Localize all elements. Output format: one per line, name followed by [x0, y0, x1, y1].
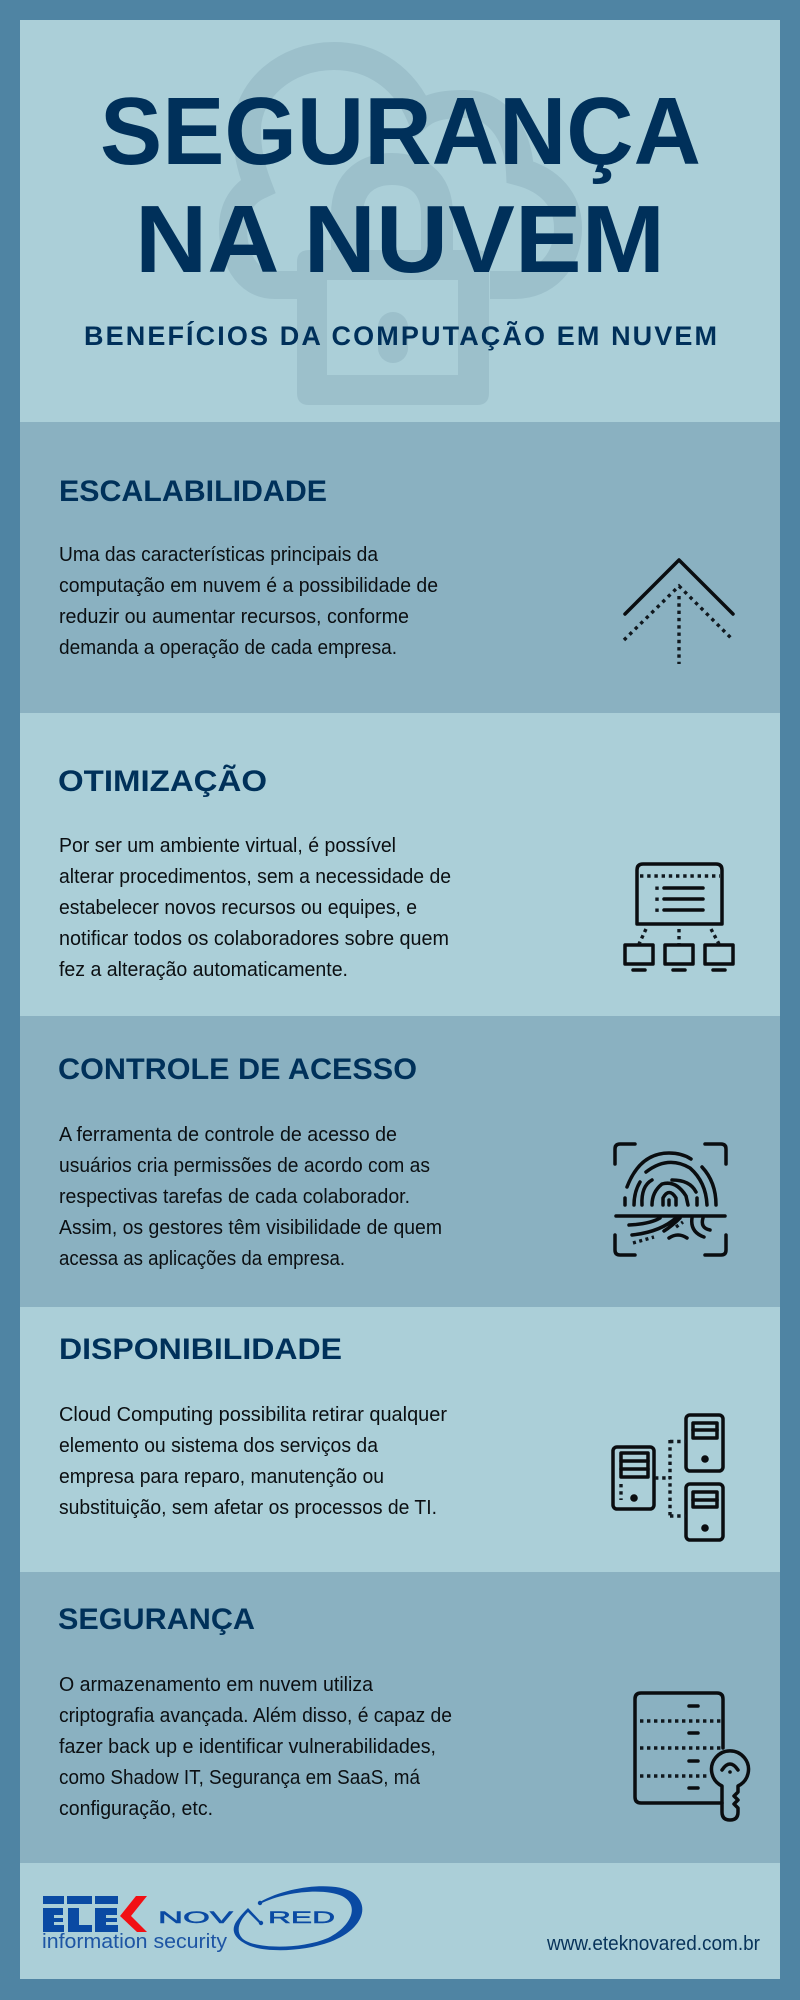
subtitle: BENEFÍCIOS DA COMPUTAÇÃO EM NUVEM [84, 320, 717, 351]
logo text: Novared [158, 1908, 335, 1927]
panel: footer [20, 1863, 780, 1979]
panel: escalabilidade [20, 422, 780, 713]
text: controle de acesso: A ferramenta de controle de acesso de [59, 1124, 397, 1146]
heading: otimização: OTIMIZAÇÃO [58, 764, 267, 798]
text: segurança: como Shadow IT, Segurança em SaaS, má [59, 1767, 421, 1789]
text: otimização: fez a alteração automaticamente. [59, 959, 348, 981]
text: escalabilidade: computação em nuvem é a possibilidade de [59, 575, 438, 597]
text: segurança: fazer back up e identificar vulnerabilidades, [59, 1736, 436, 1758]
logo swoosh [234, 1886, 362, 1950]
text: otimização: estabelecer novos recursos ou equipes, e [59, 897, 417, 919]
text: escalabilidade: Uma das características principais da [59, 544, 379, 566]
panel: segurança [20, 1572, 780, 1863]
title: NA NUVEM [135, 186, 665, 293]
heading: controle de acesso: CONTROLE DE ACESSO [58, 1053, 417, 1086]
icon: connected servers [613, 1415, 723, 1540]
text: controle de acesso [59, 1124, 442, 1270]
website url: www.eteknovared.com.br [546, 1933, 760, 1955]
text: otimização: Por ser um ambiente virtual, é possível [59, 835, 396, 857]
panel: controle de acesso [20, 1016, 780, 1307]
logo: ETEK Novared [42, 1886, 362, 1953]
logo mark: ETEK [43, 1896, 147, 1932]
text: segurança: O armazenamento em nuvem utiliza [59, 1674, 374, 1696]
text: otimização: notificar todos os colaboradores sobre quem [59, 928, 449, 950]
icon: server with key [635, 1693, 748, 1820]
title: SEGURANÇA [100, 78, 701, 185]
logo text: Novared: RED [268, 1908, 335, 1927]
heading: disponibilidade: DISPONIBILIDADE [59, 1333, 342, 1366]
text: controle de acesso: acessa as aplicações da empresa. [59, 1248, 345, 1270]
heading: escalabilidade: ESCALABILIDADE [59, 475, 327, 508]
icon: fingerprint scanner [615, 1144, 726, 1255]
heading: segurança: SEGURANÇA [58, 1603, 255, 1636]
text: otimização [59, 835, 451, 981]
title [100, 78, 701, 293]
logo text: Novared: NOV [158, 1908, 234, 1927]
text: segurança [59, 1674, 452, 1820]
panel: header [20, 20, 780, 422]
text: escalabilidade: demanda a operação de cada empresa. [59, 637, 397, 659]
text: controle de acesso: Assim, os gestores têm visibilidade de quem [59, 1217, 442, 1239]
panel: otimização [20, 713, 780, 1016]
icon: cloud and padlock watermark [233, 56, 568, 405]
text: disponibilidade: substituição, sem afetar os processos de TI. [59, 1497, 437, 1519]
text: disponibilidade [59, 1404, 447, 1519]
text: segurança: configuração, etc. [59, 1798, 213, 1820]
icon: up arrow [624, 560, 733, 664]
icon: network of monitors [625, 864, 733, 970]
text: controle de acesso: respectivas tarefas de cada colaborador. [59, 1186, 410, 1208]
text: controle de acesso: usuários cria permissões de acordo com as [59, 1155, 430, 1177]
text: disponibilidade: empresa para reparo, manutenção ou [59, 1466, 384, 1488]
text: disponibilidade: elemento ou sistema dos serviços da [59, 1435, 379, 1457]
text: disponibilidade: Cloud Computing possibilita retirar qualquer [59, 1404, 447, 1426]
text: escalabilidade: reduzir ou aumentar recursos, conforme [59, 606, 409, 628]
text: escalabilidade [59, 544, 438, 659]
panel: disponibilidade [20, 1307, 780, 1572]
text: otimização: alterar procedimentos, sem a necessidade de [59, 866, 451, 888]
logo text: information security: information security [42, 1931, 227, 1953]
text: segurança: criptografia avançada. Além disso, é capaz de [59, 1705, 452, 1727]
